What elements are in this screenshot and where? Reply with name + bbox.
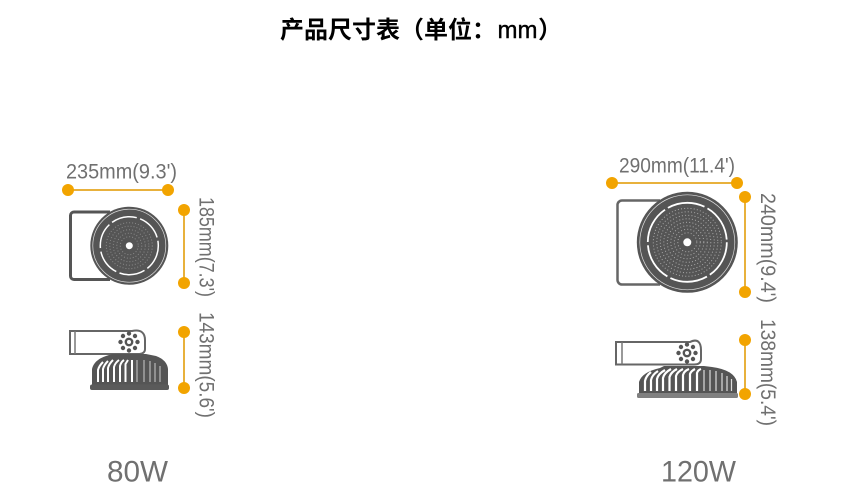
depth dimension line 120W <box>739 191 751 298</box>
wattage label 120W: 120W <box>661 456 737 488</box>
height label 80W: 143mm(5.6') <box>194 312 218 418</box>
title: 产品尺寸表（单位： <box>280 17 496 44</box>
width label 80W: 235mm(9.3') <box>66 160 177 184</box>
depth label 80W: 185mm(7.3') <box>194 197 218 297</box>
depth label 120W: 240mm(9.4') <box>756 193 780 303</box>
icon: 80W side view <box>70 330 169 390</box>
height dimension line 80W <box>178 326 190 394</box>
icon: 120W side view <box>616 341 738 398</box>
width dimension line 120W <box>606 177 743 189</box>
icon: 80W top view <box>70 207 168 285</box>
wattage label 80W: 80W <box>107 456 169 488</box>
icon: 120W top view <box>618 192 738 293</box>
panel: 120W product <box>606 154 780 488</box>
title: mm <box>498 17 537 44</box>
width dimension line 80W <box>62 184 174 196</box>
title: ） <box>538 17 562 44</box>
height dimension line 120W <box>739 334 751 400</box>
height label 120W: 138mm(5.4') <box>756 319 780 426</box>
width label 120W: 290mm(11.4') <box>619 154 735 178</box>
depth dimension line 80W <box>178 204 190 289</box>
panel: 80W product <box>62 160 218 488</box>
